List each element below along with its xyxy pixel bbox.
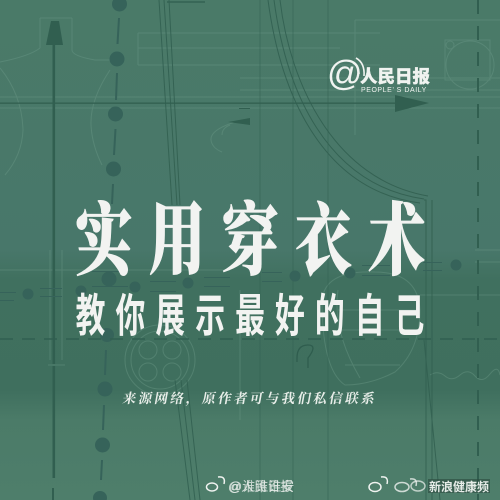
- long vertical arrow: [46, 21, 63, 500]
- watermark: right: 新浪健康频: [429, 479, 489, 494]
- horizontal rule with arrow: [0, 95, 429, 112]
- source note: 来源网络，原作者可与我们私信联系: [121, 390, 379, 407]
- horizontal dashed axis: [0, 338, 500, 340]
- drafting lines: [159, 0, 440, 500]
- small arrow: [228, 108, 250, 125]
- logo @ icon: @: [327, 54, 363, 93]
- logo wordmark: 人民日报: [360, 66, 430, 86]
- logo: People's Daily: [327, 54, 430, 94]
- row of dots and dashes: [0, 260, 462, 301]
- dark text backing: [428, 479, 490, 493]
- faint button: [125, 325, 195, 395]
- weibo icon: [369, 477, 425, 492]
- faint pocket: [322, 272, 420, 385]
- subtitle: 教你展示最好的自己: [76, 291, 434, 342]
- dotted dashed axis: [93, 0, 127, 500]
- title: 实用穿衣术: [76, 197, 441, 285]
- logo English name: PEOPLE’ S DAILY: [361, 87, 427, 94]
- weibo icon: [206, 477, 224, 491]
- curved arrow: [297, 345, 313, 368]
- watermark: left: [206, 477, 294, 494]
- watermark: left: @谁谁谁安: [229, 479, 294, 494]
- watermark: right: [369, 477, 490, 494]
- watermark: left: @人民日报: [228, 479, 293, 494]
- right dashed axis: [477, 0, 479, 500]
